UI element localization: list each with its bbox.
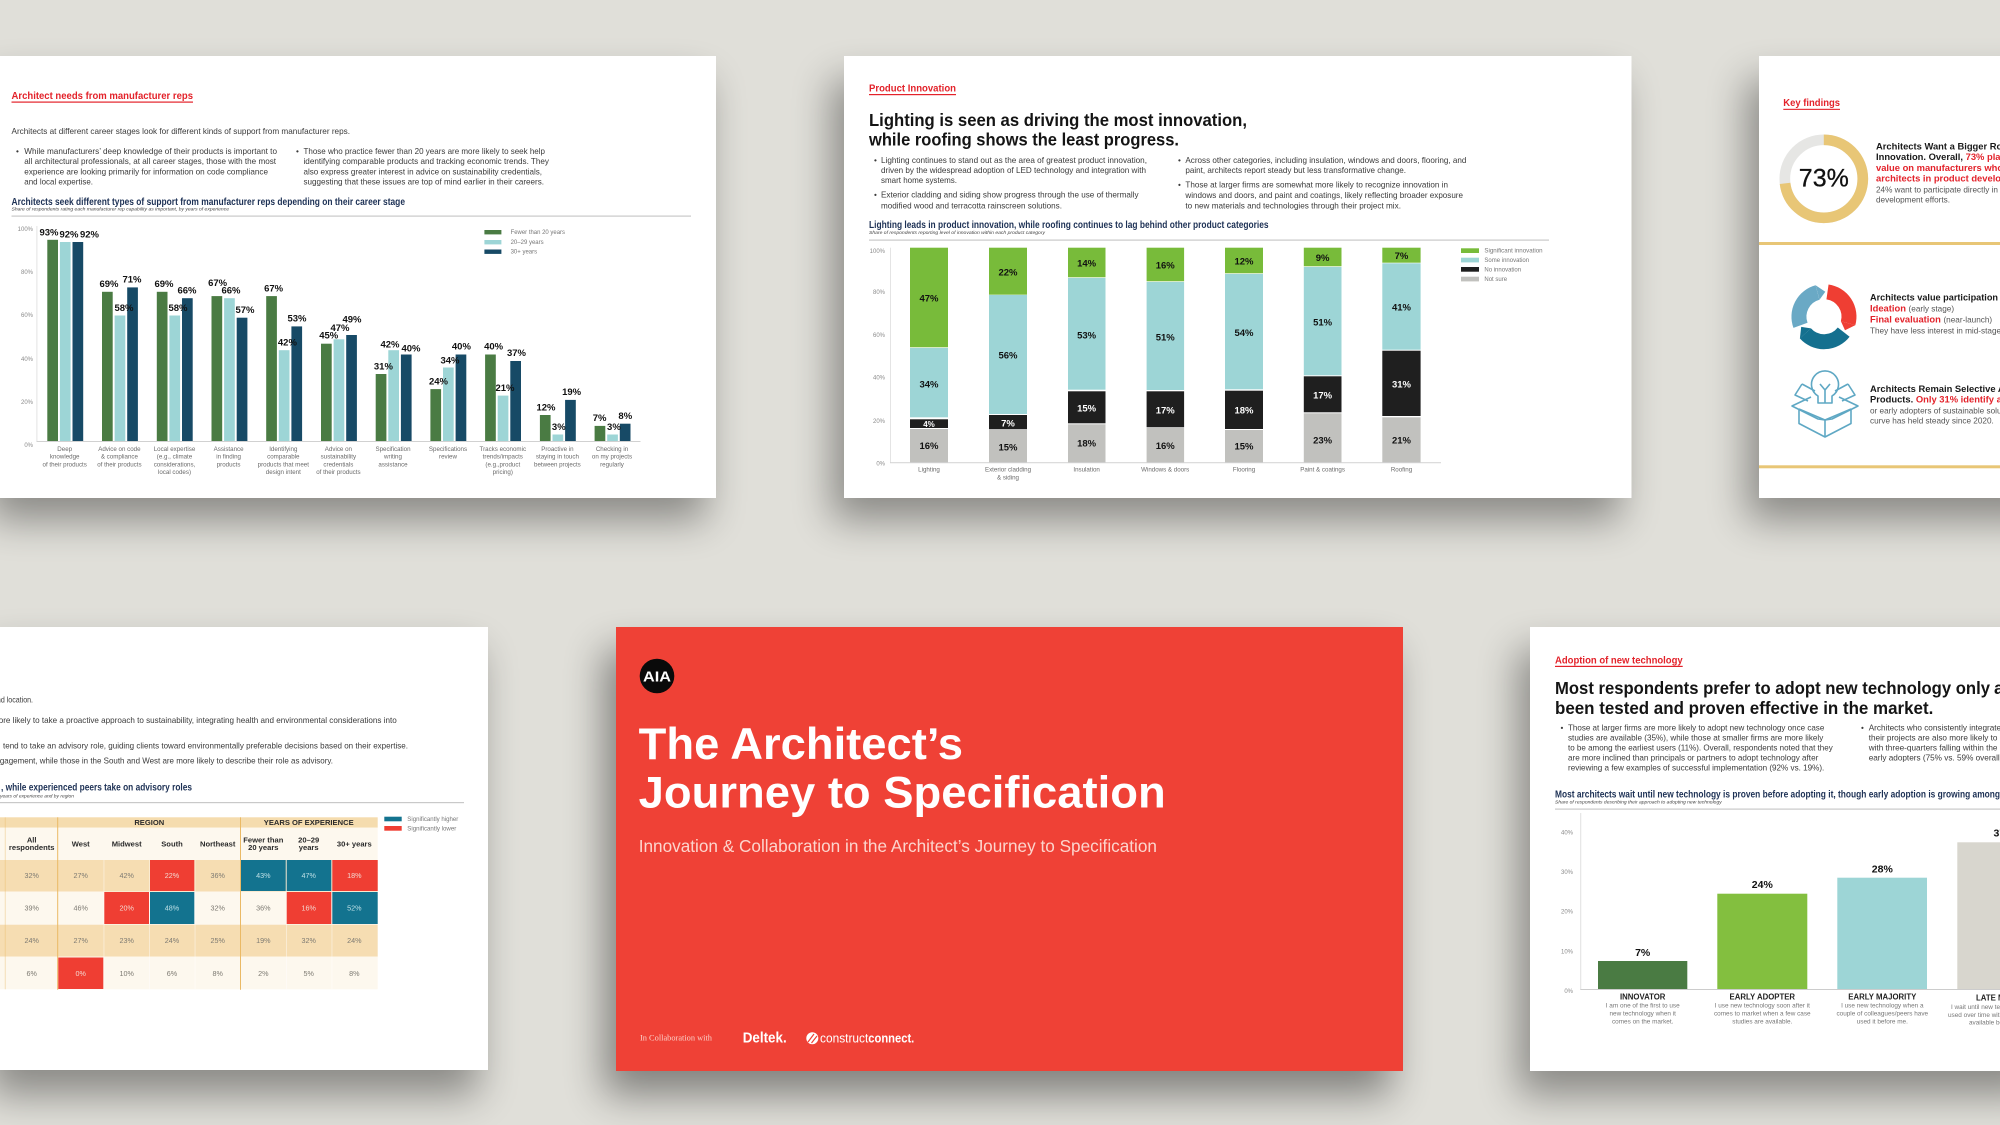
cover title <box>639 720 1166 818</box>
grouped bar chart: support by career stage: of their products <box>43 462 87 468</box>
data table: 27% <box>74 871 88 880</box>
grouped bar chart: support by career stage: products <box>217 462 240 468</box>
data table: Fewer than <box>243 835 284 844</box>
bullets left: driven by the widespread adoption of LED technology and integration with <box>881 166 1146 175</box>
bullets left: modified wood and terracotta rainscreen solutions. <box>881 201 1062 210</box>
grouped bar chart: support by career stage: Identifying <box>269 446 298 453</box>
bullets left <box>874 156 1147 210</box>
bullets left: reviewing a few examples of successful implementation (92% vs. 19%). <box>1568 764 1824 773</box>
data table: Midwest <box>112 839 142 848</box>
data table: 19% <box>256 936 271 945</box>
chart heading: years of experience and by region <box>0 793 74 798</box>
stacked bar chart: innovation by category: 16% <box>1156 260 1175 271</box>
grouped bar chart: support by career stage: Advice on <box>325 446 353 453</box>
chart heading <box>0 782 192 798</box>
icon: lightbulb in open box <box>1792 371 1858 437</box>
data table: 24% <box>347 936 362 945</box>
data table: 47% <box>302 871 316 880</box>
grouped bar chart: support by career stage: & compliance <box>101 454 139 460</box>
cover title: The Architect’s <box>639 720 963 769</box>
grouped bar chart: support by career stage: staying in touch <box>536 454 579 460</box>
grouped bar chart: support by career stage: 80% <box>21 270 34 276</box>
headline: been tested and proven effective in the market. <box>1555 698 1933 718</box>
stacked bar chart: innovation by category: 12% <box>1234 256 1254 267</box>
grouped bar chart: support by career stage: 71% <box>122 274 142 285</box>
finding 1 text: development efforts. <box>1876 196 1950 205</box>
data table: 32% <box>302 936 316 945</box>
legend: innovation level: No innovation <box>1484 267 1521 273</box>
bar chart: adopter categories: 7% <box>1635 947 1651 959</box>
grouped bar chart: support by career stage: Checking in <box>596 446 629 453</box>
bar chart: adopter categories <box>1561 813 2000 1026</box>
bullets right <box>296 147 550 186</box>
bullets left: While manufacturers’ deep knowledge of their products is important to <box>24 147 277 156</box>
stacked bar chart: innovation by category: 18% <box>1234 406 1254 417</box>
grouped bar chart: support by career stage: Assistance <box>214 446 244 453</box>
data table: 27% <box>74 936 88 945</box>
chart heading <box>12 197 405 212</box>
grouped bar chart: support by career stage: 31% <box>374 361 393 372</box>
bullets left <box>16 147 277 186</box>
chart heading: Architects seek different types of support from manufacturer reps depending on their career stage <box>12 197 405 208</box>
data table: 52% <box>347 904 362 912</box>
bar chart: adopter categories: I use new technology when a <box>1841 1003 1924 1010</box>
legend: significance: Significantly lower <box>407 827 456 833</box>
grouped bar chart: support by career stage: of their products <box>316 469 361 476</box>
grouped bar chart: support by career stage: design intent <box>266 469 301 476</box>
bullets left: Those at larger firms are more likely to adopt new technology once case <box>1568 724 1825 733</box>
data table: 24% <box>165 936 180 945</box>
stacked bar chart: innovation by category: 53% <box>1077 331 1097 342</box>
data table: 32% <box>211 904 225 912</box>
bullets left: • <box>874 191 877 200</box>
collaboration credit: In Collaboration with <box>640 1033 713 1043</box>
data table: 36% <box>211 871 225 880</box>
grouped bar chart: support by career stage: (e.g.,product <box>485 462 520 468</box>
chart heading: Lighting leads in product innovation, while roofing continues to lag behind other product categories <box>869 220 1269 231</box>
bullets right: Those at larger firms are somewhat more likely to recognize innovation in <box>1185 181 1448 190</box>
stacked bar chart: innovation by category: 23% <box>1313 436 1333 447</box>
data table: 43% <box>256 871 271 880</box>
stacked bar chart: innovation by category: Roofing <box>1391 466 1413 474</box>
data table: All <box>27 835 37 844</box>
legend: innovation level <box>1461 248 1543 283</box>
grouped bar chart: support by career stage: Local expertise <box>154 446 196 453</box>
chart heading: , while experienced peers take on advisory roles <box>1 782 192 793</box>
bullets right: • <box>1861 724 1864 733</box>
grouped bar chart: support by career stage: comparable <box>267 454 300 460</box>
legend: significance <box>384 817 458 833</box>
data table: 24% <box>25 936 39 945</box>
grouped bar chart: support by career stage: assistance <box>378 462 408 468</box>
grouped bar chart: support by career stage: sustainability <box>321 454 357 460</box>
grouped bar chart: support by career stage: 24% <box>429 376 449 387</box>
grouped bar chart: support by career stage: 53% <box>287 314 307 325</box>
stacked bar chart: innovation by category: 16% <box>1156 441 1175 452</box>
grouped bar chart: support by career stage: Tracks economic <box>480 446 526 453</box>
stacked bar chart: innovation by category: Insulation <box>1073 466 1100 474</box>
stacked bar chart: innovation by category: 22% <box>998 267 1018 278</box>
grouped bar chart: support by career stage: 8% <box>618 411 633 422</box>
panel: report cover <box>616 627 1403 1071</box>
data table: 6% <box>27 969 38 978</box>
legend: innovation level: Some innovation <box>1484 258 1529 264</box>
data table: 10% <box>120 969 134 978</box>
grouped bar chart: support by career stage: 3% <box>607 422 621 433</box>
finding 3 text: curve has held steady since 2020. <box>1870 416 1994 425</box>
chart heading <box>869 220 1269 235</box>
grouped bar chart: support by career stage: 40% <box>21 357 34 363</box>
grouped bar chart: support by career stage: 42% <box>380 340 400 351</box>
grouped bar chart: support by career stage: 93% <box>39 228 59 238</box>
bar chart: adopter categories: I am one of the first to use <box>1606 1003 1680 1010</box>
bullets right: • <box>1178 156 1181 165</box>
stacked bar chart: innovation by category: Exterior cladding <box>985 466 1032 474</box>
logo: AIA <box>640 659 674 693</box>
stacked bar chart: innovation by category: 60% <box>873 333 886 339</box>
bullets right: Those who practice fewer than 20 years are more likely to seek help <box>304 147 545 156</box>
stacked bar chart: innovation by category: 15% <box>998 442 1018 453</box>
headline <box>1555 678 2000 718</box>
stacked bar chart: innovation by category: 20% <box>873 419 886 425</box>
stacked bar chart: innovation by category: 17% <box>1156 406 1175 417</box>
bullets right: paint, architects report steady but less transformative change. <box>1185 166 1406 175</box>
stacked bar chart: innovation by category: 100% <box>870 249 886 255</box>
bar chart: adopter categories: 40% <box>1561 830 1574 836</box>
grouped bar chart: support by career stage: Specification <box>375 446 411 453</box>
section label: Architect needs from manufacturer reps <box>12 90 193 102</box>
body text: engagement, while those in the South and West are more likely to describe their role as advisory. <box>0 756 333 765</box>
grouped bar chart: support by career stage: of their products <box>97 462 142 468</box>
bullets left: all architectural professionals, at all career stages, those with the most <box>24 157 277 166</box>
grouped bar chart: support by career stage <box>18 226 640 476</box>
grouped bar chart: support by career stage: 34% <box>440 355 460 366</box>
stacked bar chart: innovation by category: 34% <box>919 379 939 390</box>
grouped bar chart: support by career stage: 60% <box>21 313 34 319</box>
stacked bar chart: innovation by category: 80% <box>873 290 886 296</box>
grouped bar chart: support by career stage: 69% <box>99 279 119 290</box>
legend: career stage: 30+ years <box>511 250 537 256</box>
stacked bar chart: innovation by category: 54% <box>1234 328 1254 339</box>
grouped bar chart: support by career stage: 69% <box>154 279 174 290</box>
data table: 0% <box>76 969 87 978</box>
stacked bar chart: innovation by category: Paint & coatings <box>1300 466 1345 474</box>
grouped bar chart: support by career stage: 92% <box>59 230 79 240</box>
bar chart: adopter categories: comes to market when a few case <box>1714 1010 1811 1017</box>
grouped bar chart: support by career stage: 92% <box>80 230 100 240</box>
stacked bar chart: innovation by category: 21% <box>1392 436 1412 447</box>
data table: 20% <box>120 904 134 912</box>
grouped bar chart: support by career stage: 100% <box>18 227 34 233</box>
grouped bar chart: support by career stage: pricing) <box>493 469 513 476</box>
legend: significance: Significantly higher <box>407 817 458 823</box>
intro text: Architects at different career stages look for different kinds of support from manufacturer reps. <box>12 127 350 136</box>
bar chart: adopter categories: EARLY MAJORITY <box>1848 992 1917 1001</box>
grouped bar chart: support by career stage: 66% <box>221 285 241 296</box>
stacked bar chart: innovation by category: 56% <box>998 351 1018 362</box>
bullets left: Exterior cladding and siding show progress through the use of thermally <box>881 191 1139 200</box>
logo: Deltek: Deltek. <box>743 1029 787 1046</box>
data table: respondents <box>9 843 54 852</box>
bar chart: adopter categories: 10% <box>1561 949 1574 955</box>
data table: 20–29 <box>298 835 319 844</box>
bullets right <box>1178 156 1467 210</box>
grouped bar chart: support by career stage: 19% <box>562 387 582 398</box>
grouped bar chart: support by career stage: 45% <box>319 331 339 342</box>
grouped bar chart: support by career stage: 40% <box>484 342 504 353</box>
grouped bar chart: support by career stage: trends/impacts <box>483 454 523 460</box>
finding 2 text: Architects value participation <box>1870 292 1998 303</box>
grouped bar chart: support by career stage: 20% <box>21 400 34 406</box>
stacked bar chart: innovation by category: 18% <box>1077 439 1097 450</box>
stacked bar chart: innovation by category: 0% <box>876 462 886 468</box>
headline: while roofing shows the least progress. <box>868 130 1179 150</box>
data table: 36% <box>256 904 271 912</box>
grouped bar chart: support by career stage: knowledge <box>50 454 80 460</box>
bar chart: adopter categories: I use new technology soon after it <box>1715 1003 1810 1010</box>
grouped bar chart: support by career stage: Advice on code <box>98 446 141 453</box>
data table: West <box>72 839 90 848</box>
grouped bar chart: support by career stage: 49% <box>342 315 362 326</box>
data table: 20 years <box>248 843 279 852</box>
panel: key findings <box>1759 56 2000 498</box>
data table <box>0 817 378 990</box>
grouped bar chart: support by career stage: 58% <box>168 303 188 314</box>
data table: 30+ years <box>337 839 372 848</box>
finding 1 text <box>1876 140 2000 205</box>
headline: Most respondents prefer to adopt new technology only <box>1555 678 1990 698</box>
bullets left: smart home systems. <box>881 176 957 185</box>
bullets left: Lighting continues to stand out as the area of greatest product innovation, <box>881 156 1147 165</box>
bullets left: experience are looking primarily for information on code compliance <box>24 167 268 176</box>
chart heading: Share of respondents reporting level of innovation within each product category <box>869 230 1046 235</box>
grouped bar chart: support by career stage: 0% <box>24 443 34 449</box>
chart heading: Share of respondents rating each manufacturer rep capability as important, by years of experience <box>12 207 229 212</box>
finding 2 text: Final evaluation (near-launch) <box>1870 313 1992 324</box>
stacked bar chart: innovation by category: 47% <box>919 293 939 304</box>
stacked bar chart: innovation by category: 15% <box>1234 442 1254 453</box>
logo: constructconnect <box>806 1030 914 1045</box>
grouped bar chart: support by career stage: 12% <box>536 402 556 413</box>
bar chart: adopter categories: used it before me. <box>1857 1018 1908 1025</box>
stacked bar chart: innovation by category: 17% <box>1313 390 1333 401</box>
grouped bar chart: support by career stage: 42% <box>278 338 297 349</box>
icon: cycle arrows <box>1799 285 1855 342</box>
bullets left <box>1560 724 1834 773</box>
stacked bar chart: innovation by category <box>870 248 1441 482</box>
grouped bar chart: support by career stage: 66% <box>177 285 197 296</box>
bar chart: adopter categories: 24% <box>1752 879 1773 891</box>
stacked bar chart: innovation by category: 16% <box>919 441 939 452</box>
grouped bar chart: support by career stage: in finding <box>216 454 242 460</box>
grouped bar chart: support by career stage: products that meet <box>258 462 309 468</box>
section label: Key findings <box>1783 97 1840 109</box>
data table: 39% <box>25 904 39 912</box>
bullets left: are more inclined than principals or partners to adopt technology after <box>1568 754 1819 763</box>
grouped bar chart: support by career stage: local codes) <box>158 469 191 476</box>
data table: 2% <box>258 969 269 978</box>
grouped bar chart: support by career stage: 21% <box>495 383 515 394</box>
grouped bar chart: support by career stage: 67% <box>264 283 284 294</box>
stacked bar chart: innovation by category: 7% <box>1001 418 1015 429</box>
bullets right: suggesting that these issues are top of mind earlier in their careers. <box>304 177 544 186</box>
body text: more likely to take a proactive approach to sustainability, integrating health and environmental considerations into <box>0 716 397 725</box>
legend: career stage <box>484 230 565 256</box>
grouped bar chart: support by career stage: regularly <box>600 462 625 468</box>
body text: tend to take an advisory role, guiding clients toward environmentally preferable decisions based on their expertise. <box>3 741 408 750</box>
stacked bar chart: innovation by category: 14% <box>1077 259 1097 270</box>
stacked bar chart: innovation by category: 40% <box>873 376 886 382</box>
data table: 25% <box>211 936 225 945</box>
bar chart: adopter categories: INNOVATOR <box>1620 992 1666 1001</box>
grouped bar chart: support by career stage: 67% <box>208 278 228 289</box>
data table: YEARS OF EXPERIENCE <box>264 818 354 827</box>
bullets right: identifying comparable products and tracking economic trends. They <box>304 157 550 166</box>
data table: 42% <box>120 871 134 880</box>
stacked bar chart: innovation by category: Windows & doors <box>1141 466 1189 474</box>
logo: constructconnect: construct <box>820 1030 869 1045</box>
bullets right: to new materials and technologies through their project mix. <box>1185 201 1401 210</box>
donut chart: 73% <box>1785 140 1863 218</box>
section label: Product Innovation <box>869 83 956 95</box>
bullets right: • <box>296 147 299 156</box>
bullets left: studies are available (35%), while those at smaller firms are more likely <box>1568 734 1824 743</box>
bullets left: • <box>874 156 877 165</box>
data table: 5% <box>304 969 315 978</box>
headline <box>868 110 1247 150</box>
panel: product innovation <box>844 56 1632 498</box>
grouped bar chart: support by career stage: Specifications <box>429 446 467 453</box>
stacked bar chart: innovation by category: 9% <box>1316 253 1330 264</box>
grouped bar chart: support by career stage: 3% <box>552 422 566 433</box>
bar chart: adopter categories: 28% <box>1872 863 1893 875</box>
grouped bar chart: support by career stage: (e.g., climate <box>157 454 193 460</box>
stacked bar chart: innovation by category: Lighting <box>918 466 940 474</box>
bullets right: • <box>1178 181 1181 190</box>
panel: architect needs from manufacturer reps <box>0 56 716 498</box>
panel: regional and experience table <box>0 627 488 1070</box>
bar chart: adopter categories: new technology when it <box>1609 1010 1676 1017</box>
bar chart: adopter categories: EARLY ADOPTER <box>1730 992 1795 1001</box>
panel: adoption of new technology <box>1530 627 2000 1071</box>
logo: constructconnect: connect. <box>868 1030 914 1045</box>
cover subtitle: Innovation & Collaboration in the Architect’s Journey to Specification <box>639 836 1157 856</box>
bullets left: • <box>16 147 19 156</box>
bullets right <box>1861 724 2000 763</box>
data table: 6% <box>167 969 178 978</box>
grouped bar chart: support by career stage: 58% <box>114 303 134 314</box>
stacked bar chart: innovation by category: Flooring <box>1233 466 1256 474</box>
grouped bar chart: support by career stage: credentials <box>323 462 353 468</box>
finding 2 text <box>1870 292 2000 335</box>
grouped bar chart: support by career stage: Deep <box>57 446 73 453</box>
data table: REGION <box>134 818 164 827</box>
logo: AIA: AIA <box>643 670 672 686</box>
grouped bar chart: support by career stage: on my projects <box>592 454 632 460</box>
bar chart: adopter categories: couple of colleagues/peers have <box>1836 1010 1929 1017</box>
grouped bar chart: support by career stage: 7% <box>593 413 607 424</box>
grouped bar chart: support by career stage: between projects <box>534 462 581 468</box>
bar chart: adopter categories: 20% <box>1561 910 1574 916</box>
grouped bar chart: support by career stage: 57% <box>235 305 255 316</box>
bullets right: windows and doors, and paint and coatings, likely reflecting broader exposure <box>1184 191 1463 200</box>
data table: 32% <box>25 871 39 880</box>
legend: career stage: 20–29 years <box>511 240 544 246</box>
bar chart: adopter categories: 30% <box>1561 870 1574 876</box>
bullets left: • <box>1560 724 1564 733</box>
grouped bar chart: support by career stage: 40% <box>401 343 421 354</box>
grouped bar chart: support by career stage: writing <box>383 454 402 460</box>
data table: 18% <box>347 871 362 880</box>
body text <box>0 696 408 765</box>
bullets left: and local expertise. <box>24 177 93 186</box>
finding 2 text: Ideation (early stage) <box>1870 303 1954 314</box>
data table: 8% <box>349 969 360 978</box>
legend: innovation level: Not sure <box>1484 277 1508 283</box>
stacked bar chart: innovation by category: 51% <box>1313 317 1333 328</box>
stacked bar chart: innovation by category: 31% <box>1392 380 1412 391</box>
data table: 46% <box>74 904 88 912</box>
data table: 48% <box>165 904 180 912</box>
grouped bar chart: support by career stage: 47% <box>330 323 350 334</box>
data table: 16% <box>302 904 316 912</box>
grouped bar chart: support by career stage: 40% <box>452 342 471 353</box>
data table: 23% <box>120 936 134 945</box>
bullets right: also express greater interest in advice on sustainability credentials, <box>304 167 542 176</box>
finding 3 text <box>1870 383 2000 425</box>
stacked bar chart: innovation by category: 7% <box>1395 251 1409 262</box>
data table: 8% <box>213 969 224 978</box>
bar chart: adopter categories: comes on the market. <box>1612 1018 1674 1025</box>
stacked bar chart: innovation by category: 15% <box>1077 404 1097 415</box>
chart heading: Share of respondents describing their approach to adopting new technology <box>1555 799 1722 804</box>
data table: 22% <box>165 871 180 880</box>
data table: Northeast <box>200 839 236 848</box>
legend: career stage: Fewer than 20 years <box>511 230 565 236</box>
grouped bar chart: support by career stage: considerations, <box>154 462 196 468</box>
grouped bar chart: support by career stage: review <box>439 454 457 460</box>
grouped bar chart: support by career stage: Proactive in <box>541 446 574 453</box>
finding 2 text: They have less interest in mid-stage <box>1870 326 2000 335</box>
stacked bar chart: innovation by category: & siding <box>997 474 1020 482</box>
cover title: Journey to Specification <box>639 769 1166 818</box>
section label: Adoption of new technology <box>1555 654 1683 666</box>
stacked bar chart: innovation by category: 4% <box>923 420 935 429</box>
legend: innovation level: Significant innovation <box>1484 249 1543 255</box>
donut chart: 73%: 73% <box>1799 165 1849 193</box>
bar chart: adopter categories: studies are available. <box>1732 1018 1793 1025</box>
stacked bar chart: innovation by category: 41% <box>1392 302 1412 313</box>
bullets left: to be among the earliest users (11%). Overall, respondents noted that they <box>1568 744 1834 753</box>
finding 1 text: 24% want to participate directly in <box>1876 185 1998 194</box>
stacked bar chart: innovation by category: 51% <box>1156 333 1175 344</box>
data table: years <box>299 843 319 852</box>
grouped bar chart: support by career stage: 37% <box>507 348 527 359</box>
bullets right: Across other categories, including insulation, windows and doors, flooring, and <box>1185 156 1467 165</box>
data table: South <box>161 839 183 848</box>
headline: Lighting is seen as driving the most innovation, <box>869 110 1247 130</box>
bar chart: adopter categories: 0% <box>1564 989 1574 995</box>
